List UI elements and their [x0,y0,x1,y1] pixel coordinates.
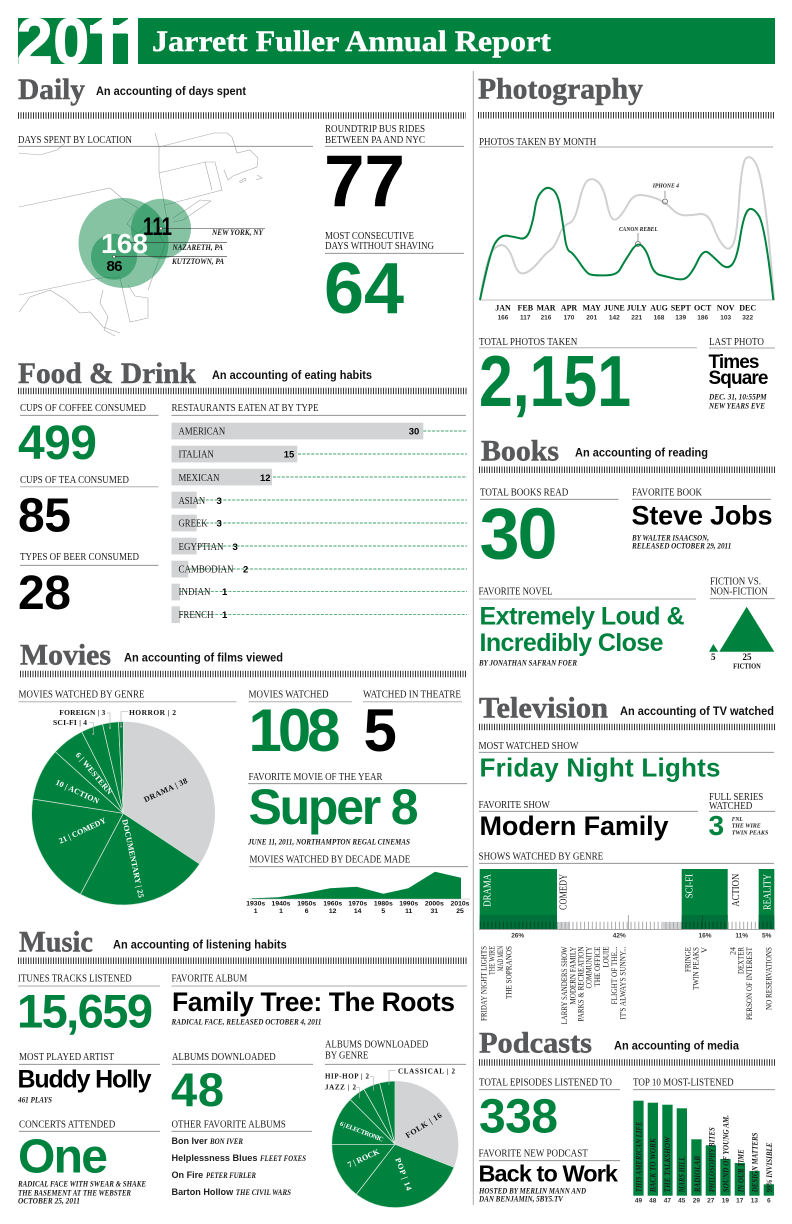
month labels: 170 [564,314,575,321]
stat: favorite novel: BY JONATHAN SAFRAN FOER [478,658,578,667]
stat: favorite movie: JUNE 11, 2011, NORTHAMPTON REGAL CINEMAS [247,837,410,846]
month labels: AUG [650,304,668,313]
stat: total photos: TOTAL PHOTOS TAKEN [479,337,578,348]
area chart: movies by decade: 1960s [323,900,342,908]
list: other favorite albums: Bon Iver [172,1136,208,1147]
panel: podcasts [478,1027,775,1205]
bar chart: top 10 podcasts: IN OUR TIME [736,1149,745,1193]
triangle chart: fiction vs non-fiction: 25 [742,652,752,662]
bar chart: restaurants by type: 3 [232,542,238,553]
stat: albums downloaded: 48 [171,1063,224,1116]
triangle chart: fiction vs non-fiction: FICTION [733,663,761,670]
label: album genres [325,1040,466,1064]
header: title banner [138,18,775,64]
stat: most watched show [478,741,774,783]
stat: full series watched: FNL [732,816,743,823]
bar chart: top 10 podcasts: TOP 10 MOST-LISTENED [633,1078,734,1089]
bar chart: restaurants by type: ASIAN [178,496,206,507]
stat: itunes tracks: 15,659 [17,985,153,1038]
stat: full series watched: TWIN PEAKS [732,829,769,836]
chart: shows by genre: DRAMA [482,874,493,907]
pie chart: movie genres [32,722,215,905]
stat: concerts attended: OCTOBER 25, 2011 [18,1197,80,1206]
stat: most watched show: MOST WATCHED SHOW [478,741,579,752]
map of locations [19,133,262,336]
chart: shows by genre: 26% [511,932,524,939]
stat: favorite album [171,974,467,1027]
stat: favorite novel: Extremely Loud & [480,602,684,630]
pie chart: movie genres: DOCUMENTARY | 25 [120,818,146,899]
heading: books: Books [481,435,559,468]
stat: itunes tracks: ITUNES TRACKS LISTENED [18,974,132,985]
place names: NEW YORK, NY [211,228,264,237]
pie chart: movie genres: 21 | COMEDY [57,816,108,846]
chart: shows by genre: 11% [735,932,748,939]
stat: favorite show [478,800,698,841]
pie callouts: small genres [53,708,176,735]
month labels: 221 [631,314,643,321]
subtitle: books: An accounting of reading [575,448,708,460]
list: shows per genre: FRINGE [682,947,692,972]
pie chart: movie genres: 6 | WESTERN [74,751,114,796]
area chart: movies by decade [246,855,470,915]
location circles [78,198,191,288]
stat: most watched show: Friday Night Lights [480,753,720,783]
bar chart: top 10 podcasts: 13 [751,1198,758,1205]
column divider [472,71,474,1205]
stat: concerts attended: THE BASEMENT AT THE WEBSTER [18,1189,132,1198]
bar chart: restaurants by type: 3 [216,496,222,507]
area chart: movies by decade: 12 [329,908,337,915]
subtitle: television: An accounting of TV watched [620,706,774,718]
bar chart: restaurants by type [172,403,467,623]
list: other favorite albums: FLEET FOXES [259,1154,306,1163]
stat: favorite movie: Super 8 [248,779,418,835]
bar chart: top 10 podcasts: BACK TO WORK [649,1138,658,1193]
stat: total books: 30 [480,494,558,574]
stat: beer: TYPES OF BEER CONSUMED [20,552,139,563]
list: other favorite albums: BON IVER [209,1137,244,1146]
area chart: movies by decade: 31 [431,908,438,915]
stat: favorite show: Modern Family [480,811,668,841]
month labels [495,304,756,321]
pie callouts: small genres: SCI-FI | 4 [53,718,87,727]
pie chart: album genres: FOLK | 16 [404,1111,443,1140]
stat: bus rides: ROUNDTRIP BUS RIDES [325,124,425,135]
line chart: photos by month: PHOTOS TAKEN BY MONTH [479,137,597,148]
month labels: FEB [518,304,534,313]
month labels: SEPT [671,304,691,313]
stat: watched in theatre: WATCHED IN THEATRE [363,690,461,701]
annotation: iphone 4: IPHONE 4 [652,183,680,190]
stat: favorite book: RELEASED OCTOBER 29, 2011 [631,542,731,551]
bar chart: top 10 podcasts: DESIGN MATTERS [750,1132,759,1193]
bar chart: restaurants by type: EGYPTIAN [178,542,224,553]
stat: days without shaving [324,231,464,329]
stat: favorite new podcast: FAVORITE NEW PODCAST [478,1149,588,1160]
list: shows per genre: MAD MEN [495,946,505,971]
month labels: 201 [586,314,598,321]
triangle chart: fiction vs non-fiction: FICTION VS. [710,576,761,587]
list: other favorite albums: PETER FURLER [206,1171,257,1180]
bar chart: top 10 podcasts: 47 [664,1198,671,1205]
month labels: 139 [675,314,687,321]
pie chart: album genres: 7 | ROCK [346,1147,381,1169]
heading: food and drink: Food & Drink [18,357,196,390]
bar chart: top 10 podcasts: 27 [707,1198,715,1205]
label: album genres: BY GENRE [325,1051,368,1062]
annotation: canon rebel [619,226,658,246]
chart: shows by genre: REALITY [763,874,774,910]
chart: shows by genre: SHOWS WATCHED BY GENRE [478,851,603,862]
list: shows per genre: THE WIRE [487,946,497,975]
bar chart: top 10 podcasts: 49 [635,1198,642,1205]
list: shows per genre: LARRY SANDERS SHOW [559,946,569,1024]
chart: shows by genre: 42% [613,932,626,939]
stat: total episodes [479,1078,620,1143]
stat: watched in theatre [363,690,462,764]
month labels: 142 [609,314,620,321]
panel: music [17,926,467,1208]
value: kutztown: 86 [106,258,122,275]
stat: total episodes: TOTAL EPISODES LISTENED TO [479,1078,612,1089]
stat: total photos: 2,151 [479,342,631,422]
area chart: movies by decade: 1930s [246,900,265,908]
area chart: movies by decade: 1980s [374,900,393,908]
triangle chart: fiction vs non-fiction [709,576,775,670]
stat: concerts attended [17,1120,160,1206]
stat: last photo: Square [708,368,768,389]
stat: most played artist: 461 PLAYS [17,1096,52,1105]
month labels: JULY [627,304,647,313]
subtitle: movies: An accounting of films viewed [124,653,283,665]
header: year block [16,4,148,78]
bar chart: restaurants by type: 3 [216,518,222,530]
list: shows per genre: NO RESERVATIONS [763,947,773,1010]
location leaders [113,227,265,258]
list: other favorite albums: On Fire [172,1170,203,1181]
area chart: movies by decade: 25 [456,908,464,915]
bar chart: restaurants by type: GREEK [178,518,208,530]
heading: photography: Photography [478,72,643,105]
stat: favorite novel: Incredibly Close [480,629,664,657]
heading: music: Music [19,926,93,959]
pie callouts: album genres: JAZZ | 2 [325,1084,356,1092]
bar chart: top 10 podcasts: SOUND OF YOUNG AM. [722,1115,731,1192]
bar chart: top 10 podcasts: 45 [678,1198,686,1205]
stat: days without shaving: 64 [324,249,404,329]
bar chart: top 10 podcasts: PHILOSOPHY BITES [708,1127,717,1192]
stat: tea: 85 [18,490,71,543]
list: shows per genre: PERSON OF INTEREST [744,946,754,1020]
area chart: movies by decade: 1990s [399,900,418,908]
month labels: MAY [583,304,601,313]
panel: television [478,692,775,1024]
bar chart: restaurants by type: AMERICAN [178,426,226,438]
stat: full series watched: 3 [708,810,724,841]
bar chart: restaurants by type: RESTAURANTS EATEN AT BY TYPE [172,403,318,414]
stat: total books: TOTAL BOOKS READ [480,488,569,499]
list: other favorite albums: Barton Hollow [172,1187,234,1198]
area chart: movies by decade: 11 [405,908,413,915]
month labels: DEC [739,304,756,313]
label: album genres: ALBUMS DOWNLOADED [325,1040,429,1051]
list: shows per genre: IT'S ALWAYS SUNNY... [617,946,627,1020]
stat: last photo [708,337,775,411]
bar chart: restaurants by type: FRENCH [178,610,214,621]
bar chart: restaurants by type: ITALIAN [178,450,214,460]
list: other favorite albums: Helplessness Blues [172,1153,258,1164]
pie callouts: album genres: CLASSICAL | 2 [398,1067,456,1075]
month labels: 166 [498,314,509,321]
annotation: canon rebel: CANON REBEL [619,226,658,233]
month labels: JAN [495,304,511,313]
list: shows per genre: FLIGHT OF THE... [609,946,619,1004]
list: other favorite albums [172,1120,312,1198]
month labels: 216 [541,314,552,321]
stat: concerts attended: CONCERTS ATTENDED [19,1120,116,1131]
bar chart: top 10 podcasts: 6 [767,1198,771,1205]
pie callouts: album genres [325,1067,456,1098]
bar chart: top 10 podcasts: 29 [693,1198,700,1205]
stat: favorite new podcast [478,1149,620,1204]
stat: full series watched: FULL SERIES [709,792,763,803]
bar chart: restaurants by type: MEXICAN [178,473,220,484]
bar chart: restaurants by type: 1 [222,587,228,598]
chart: shows by genre [478,851,775,939]
pie callouts: album genres: HIP-HOP | 2 [325,1073,370,1081]
stat: bus rides: BETWEEN PA AND NYC [325,135,425,146]
triangle chart: fiction vs non-fiction: NON-FICTION [710,586,768,597]
month labels: APR [561,304,577,313]
label: days by location: DAYS SPENT BY LOCATION [18,135,132,146]
list: shows per genre: FRIDAY NIGHT LIGHTS [478,946,488,1021]
stat: favorite book: FAVORITE BOOK [632,488,702,499]
bar chart: top 10 podcasts: 17 [736,1198,744,1205]
stat: beer [18,552,158,620]
stat: bus rides: 77 [324,141,405,222]
subtitle: music: An accounting of listening habits [113,939,287,951]
subtitle: daily: An accounting of days spent [96,86,246,98]
heading: movies: Movies [20,638,111,671]
stat: concerts attended: One [18,1130,108,1183]
month labels: JUNE [604,304,625,313]
stat: watched in theatre: 5 [364,697,397,764]
month labels: 322 [742,314,754,321]
stat: favorite novel: FAVORITE NOVEL [478,586,552,597]
list: shows per genre: DEXTER [736,947,746,974]
area chart: movies by decade: 1950s [297,900,316,908]
list: shows per genre: LOUIE [600,946,610,968]
header: year block: 20 [16,4,90,78]
stat: beer: 28 [18,567,71,620]
value: nazareth: 168 [101,228,148,259]
list: shows per genre: MODERN FAMILY [567,946,577,1004]
panel: photography [478,72,775,422]
stat: coffee: CUPS OF COFFEE CONSUMED [20,403,146,414]
month labels: MAR [536,304,556,313]
stat: favorite album: Family Tree: The Roots [172,987,455,1017]
stat: days without shaving: MOST CONSECUTIVE [325,231,414,242]
stat: favorite novel [478,586,696,667]
stat: movies watched: 108 [248,697,340,764]
bar chart: top 10 podcasts: 19 [722,1198,729,1205]
bar chart: top 10 podcasts: THE TALKSHOW [663,1136,672,1192]
stat: movies watched: MOVIES WATCHED [248,690,329,701]
stat: days without shaving: DAYS WITHOUT SHAVING [325,241,434,252]
area chart: movies by decade: 2000s [425,900,444,908]
panel: food and drink [18,357,467,623]
stat: most played artist [17,1052,160,1105]
place names: NAZARETH, PA [172,243,224,252]
stat: total episodes: 338 [479,1090,558,1143]
bar chart: restaurants by type: 12 [260,473,271,484]
area chart: movies by decade: 1 [254,908,258,915]
area chart: movies by decade: 6 [305,908,309,915]
stat: coffee [18,403,158,470]
bar chart: restaurants by type: 15 [284,450,295,460]
chart: shows by genre: 5% [762,932,772,939]
bar chart: top 10 podcasts: THIS AMERICAN LIFE [635,1122,644,1192]
stat: most played artist: Buddy Holly [18,1065,152,1093]
list: shows per genre: THE OFFICE [592,946,602,986]
stat: full series watched: THE WIRE [732,823,761,830]
list: shows per genre: COMMUNITY [583,946,593,988]
stat: concerts attended: RADICAL FACE WITH SWEAR & SHAKE [17,1180,146,1189]
subtitle: food: An accounting of eating habits [212,370,372,382]
month labels: NOV [717,304,735,313]
panel: daily [18,73,466,336]
list: shows per genre: V [699,946,709,953]
stat: coffee: 499 [18,417,97,470]
stat: albums downloaded [171,1052,313,1116]
stat: bus rides [324,124,464,222]
stat: favorite new podcast: Back to Work [478,1161,619,1187]
heading: daily: Daily [18,73,85,106]
place names [171,228,264,266]
pie callouts: small genres: FOREIGN | 3 [59,708,106,717]
pie chart: movie genres: DRAMA | 38 [142,776,189,804]
bar chart: top 10 podcasts: 48 [649,1198,657,1205]
subtitle: podcasts: An accounting of media [614,1040,740,1052]
panel: movies [18,638,470,915]
area chart: movies by decade: 1940s [272,900,291,908]
bar chart: top 10 podcasts: 99% INVISIBLE [765,1143,774,1192]
list: shows per genre: TWIN PEAKS [691,947,701,990]
pie chart: album genres [332,1081,458,1208]
stat: last photo: LAST PHOTO [709,337,764,348]
chart: shows by genre: SCI-FI [685,874,696,898]
area chart: movies by decade: 14 [354,908,362,915]
header: year block: 1 [112,5,148,78]
stat: favorite book: BY WALTER ISAACSON, [631,534,709,543]
stat: favorite show: FAVORITE SHOW [478,800,550,811]
stat: last photo: NEW YEARS EVE [708,402,765,411]
list: other favorite albums: THE CIVIL WARS [236,1188,291,1197]
label: movie genres: MOVIES WATCHED BY GENRE [18,690,144,701]
stat: tea [18,475,158,543]
chart: shows by genre: ACTION [731,873,742,907]
month labels: 117 [520,314,531,321]
value: new york: 111 [143,213,172,241]
area chart: movies by decade: 1 [279,908,283,915]
stat: most played artist: MOST PLAYED ARTIST [19,1052,114,1063]
stat: full series watched [708,792,775,841]
chart: shows by genre: 16% [698,932,712,939]
stat: favorite new podcast: HOSTED BY MERLIN MANN AND [478,1186,586,1195]
list: shows per genre: THE SOPRANOS [503,946,513,999]
bar chart: restaurants by type: 30 [409,426,419,438]
stat: favorite book: Steve Jobs [632,500,772,530]
bar chart: restaurants by type: 2 [243,564,248,576]
month labels: 186 [697,314,709,321]
triangle chart: fiction vs non-fiction: 5 [711,652,716,662]
stat: total books [480,488,618,574]
chart: shows by genre: COMEDY [559,874,570,910]
heading: podcasts: Podcasts [479,1027,592,1060]
stat: favorite movie: FAVORITE MOVIE OF THE YEAR [248,772,382,783]
list: shows per genre: PARKS & RECREATION [576,946,586,1022]
area chart: movies by decade: MOVIES WATCHED BY DECADE MADE [250,855,410,866]
bar chart: restaurants by type: CAMBODIAN [178,564,234,576]
list: shows per genre: 24 [727,946,737,955]
stat: albums downloaded: ALBUMS DOWNLOADED [172,1052,276,1063]
stat: favorite album: FAVORITE ALBUM [172,974,248,985]
bar chart: top 10 podcasts [633,1078,775,1205]
stat: last photo: Times [708,352,760,373]
area chart: movies by decade: 1970s [348,900,367,908]
header: year block: 1 [86,5,122,78]
month labels: 168 [654,314,665,321]
pie chart: album genres: 6 | ELECTRONIC [339,1121,385,1144]
bar chart: restaurants by type: 1 [222,610,228,621]
list: other favorite albums: OTHER FAVORITE ALBUMS [172,1120,286,1131]
pie callouts: small genres: HORROR | 2 [129,708,176,717]
panel: books [478,435,775,670]
stat: last photo: DEC. 31, 10:55PM [708,392,767,401]
stat: favorite movie [247,772,467,846]
bar chart: restaurants by type: INDIAN [178,587,211,598]
line chart: photos by month [479,137,775,300]
stat: favorite book [631,488,772,551]
pie chart: album genres: POP | 14 [393,1157,413,1192]
pie chart: movie genres: 10 | ACTION [54,778,101,806]
header: title banner: Jarrett Fuller Annual Report [152,25,551,58]
bar chart: top 10 podcasts: MARS HILL [678,1157,687,1193]
month labels: OCT [694,304,712,313]
stat: favorite new podcast: DAN BENJAMIN, 5BY5.TV [478,1195,564,1204]
stat: favorite album: RADICAL FACE, RELEASED OCTOBER 4, 2011 [171,1018,322,1027]
annotation: iphone 4 [652,183,680,204]
place names: KUTZTOWN, PA [171,257,225,266]
bar chart: top 10 podcasts: RADIOLAB [693,1155,702,1193]
stat: full series watched: WATCHED [709,801,753,812]
area chart: movies by decade: 2010s [451,900,470,908]
heading: television: Television [479,692,608,725]
month labels: 103 [720,314,732,321]
list: shows per genre [478,946,773,1024]
area chart: movies by decade: 5 [381,908,385,915]
stat: tea: CUPS OF TEA CONSUMED [20,475,129,486]
